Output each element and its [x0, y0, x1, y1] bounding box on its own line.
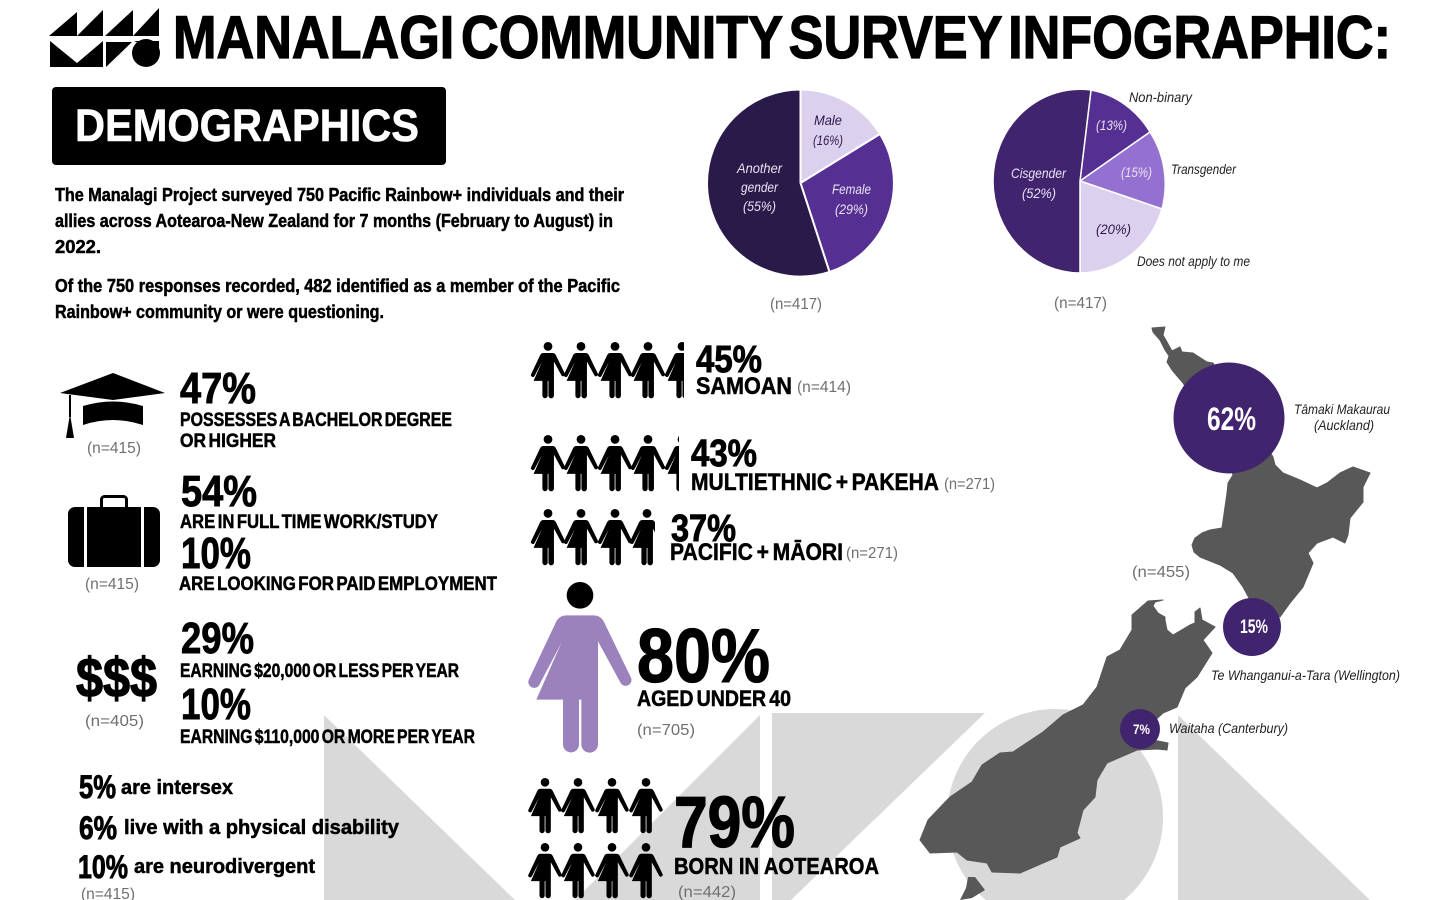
stat: multiethnic: 43% [691, 433, 757, 475]
background geometric shapes [324, 709, 1370, 900]
stat: born in aotearoa: BORN IN AOTEAROA [674, 853, 879, 879]
label: auckland [1294, 401, 1390, 433]
marker: canterbury [1120, 709, 1160, 749]
pie chart: gender identity: (n=417) [1054, 295, 1107, 312]
icon: graduation cap [60, 373, 165, 438]
stats: identity list: 5% [79, 769, 116, 805]
pie chart: gender: (29%) [835, 201, 868, 217]
stat: employment: 10% [181, 529, 251, 578]
stat: age: (n=705) [637, 722, 695, 739]
pie chart: gender: (16%) [813, 132, 843, 148]
stat: samoan: SAMOAN [696, 373, 792, 400]
stat: income: (n=405) [85, 713, 144, 730]
stat: age: AGED UNDER 40 [637, 686, 791, 711]
stat: pacific and maori: PACIFIC + MĀORI [670, 539, 843, 566]
pie chart: gender: Female [832, 181, 871, 197]
logo [49, 8, 160, 67]
pie chart: gender identity: Does not apply to me [1137, 253, 1250, 269]
map: aotearoa new zealand [920, 327, 1400, 900]
intro text: Rainbow+ community or were questioning. [55, 302, 384, 322]
pie chart: gender identity: Transgender [1171, 161, 1237, 177]
stats: identity list: 6% [79, 810, 117, 846]
marker: wellington: 15% [1240, 617, 1268, 638]
stat: pacific and maori: (n=271) [846, 545, 898, 562]
north island [1152, 327, 1370, 617]
stat: pacific and maori [531, 508, 898, 566]
icon: people row [531, 342, 699, 398]
stat: income: EARNING $20,000 OR LESS PER YEAR [180, 661, 459, 682]
icon: people rows [528, 778, 663, 898]
stat: employment: (n=415) [85, 576, 139, 593]
pie chart: gender: (55%) [743, 198, 776, 214]
label: wellington: Te Whanganui-a-Tara (Wellington) [1211, 667, 1400, 683]
section heading: demographics: DEMOGRAPHICS [75, 100, 419, 151]
stat: born in aotearoa: 79% [674, 783, 795, 863]
stats: identity list: 10% [78, 849, 128, 885]
pie chart: gender identity: (15%) [1121, 164, 1152, 180]
stat: multiethnic [531, 433, 995, 496]
stewart island [960, 877, 985, 900]
stat: multiethnic: (n=271) [944, 476, 995, 493]
stat: pacific and maori: 37% [671, 508, 736, 550]
stat: samoan: 45% [696, 339, 762, 381]
label: canterbury: Waitaha (Canterbury) [1169, 720, 1288, 736]
stat: education: POSSESSES A BACHELOR DEGREE [180, 410, 452, 431]
label: auckland: Tāmaki Makaurau [1294, 401, 1390, 417]
pie chart: gender: (n=417) [770, 296, 822, 313]
stat: employment [68, 467, 497, 595]
south island [920, 600, 1215, 873]
marker: auckland: 62% [1207, 401, 1256, 437]
intro text: 2022. [55, 237, 101, 257]
pie chart: gender identity: (52%) [1022, 185, 1056, 201]
stat: income [76, 614, 475, 748]
stat: income: 10% [181, 680, 251, 729]
stat: education: OR HIGHER [180, 431, 276, 452]
pie chart: gender identity [993, 89, 1250, 312]
stat: employment: 54% [181, 467, 257, 516]
icon: people row [530, 435, 679, 492]
pie chart: gender [707, 90, 894, 313]
intro text [55, 185, 624, 322]
pie chart: gender identity: (13%) [1096, 117, 1127, 133]
label: auckland: (Auckland) [1314, 417, 1374, 433]
stat: education: 47% [180, 364, 256, 413]
icon: briefcase [68, 496, 160, 567]
stats: identity list: are neurodivergent [134, 856, 315, 878]
pie chart: gender: Male [814, 112, 842, 128]
stat: income: EARNING $110,000 OR MORE PER YEAR [180, 727, 475, 748]
pie chart: gender identity: Non-binary [1129, 89, 1193, 105]
stat: age: 80% [637, 614, 770, 699]
map: aotearoa new zealand: (n=455) [1132, 564, 1190, 581]
marker: canterbury: 7% [1133, 721, 1150, 737]
stat: income: 29% [181, 614, 254, 663]
icon: large person [528, 582, 631, 753]
marker: wellington [1223, 598, 1281, 656]
stat: employment: ARE LOOKING FOR PAID EMPLOYMENT [179, 574, 497, 595]
stat: multiethnic: MULTIETHNIC + PAKEHA [691, 469, 939, 496]
pie chart: gender identity: Cisgender [1011, 165, 1067, 181]
pie chart: gender identity: (20%) [1096, 221, 1131, 237]
intro text: The Manalagi Project surveyed 750 Pacific Rainbow+ individuals and their [55, 185, 624, 205]
pie chart: gender: Another [736, 160, 783, 176]
stat: education: (n=415) [87, 440, 141, 457]
icon: dollar signs: $$$ [76, 646, 157, 709]
marker: auckland [1174, 362, 1284, 474]
stat: employment: ARE IN FULL TIME WORK/STUDY [180, 512, 438, 533]
stat: age [528, 582, 791, 753]
stat: samoan [531, 339, 851, 400]
intro text: allies across Aotearoa-New Zealand for 7 months (February to August) in [55, 211, 613, 231]
stats: identity list [78, 769, 400, 900]
intro text: Of the 750 responses recorded, 482 identified as a member of the Pacific [55, 276, 620, 296]
pie chart: gender: gender [741, 179, 779, 195]
stat: samoan: (n=414) [797, 379, 851, 396]
icon: people row [531, 509, 664, 565]
stats: identity list: are intersex [121, 777, 233, 799]
section heading: demographics [52, 87, 446, 165]
stat: born in aotearoa [528, 778, 879, 900]
stat: education [60, 364, 452, 457]
stats: identity list: live with a physical disability [124, 817, 400, 839]
